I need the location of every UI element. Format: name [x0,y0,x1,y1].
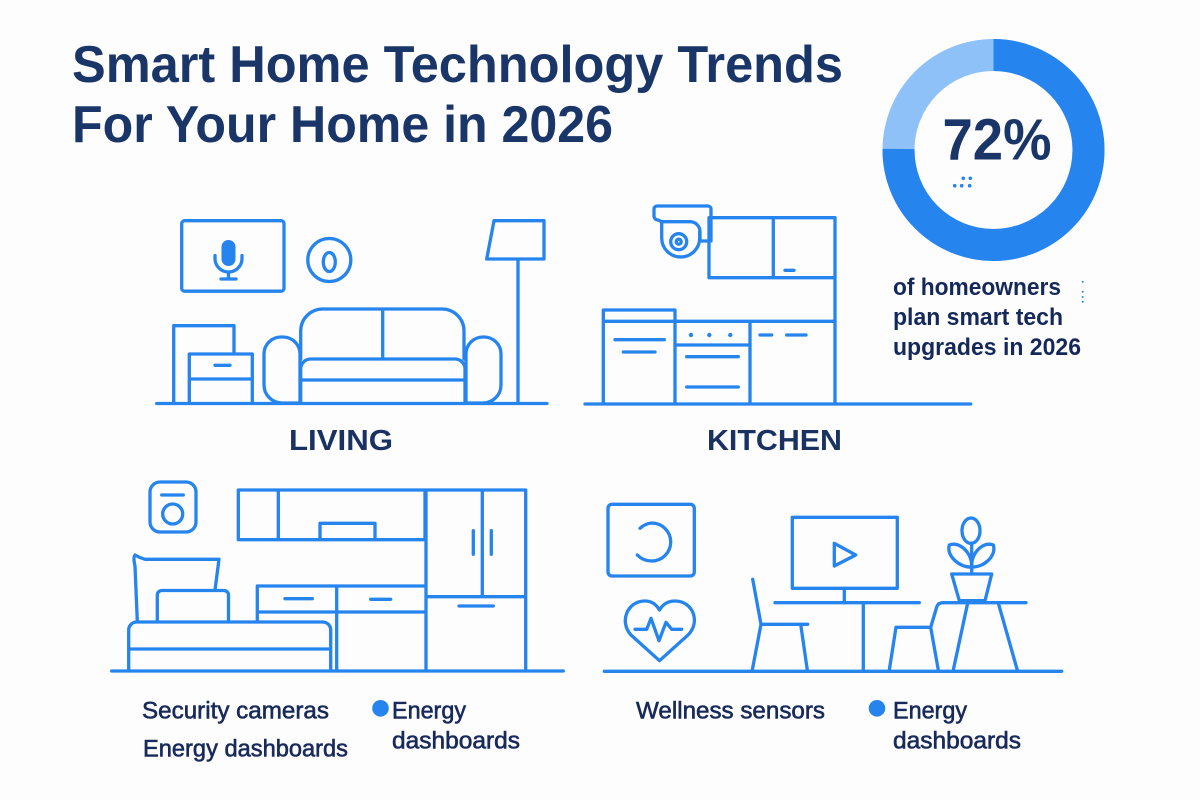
donut caption: of homeowners [893,274,1061,301]
donut chart: 72%: 72% [942,108,1052,172]
list: wellness features [636,698,1021,754]
right chair [889,603,943,670]
list: bedroom features: dashboards [392,728,520,754]
list: wellness features: Wellness sensors [636,698,825,724]
floor line [112,669,563,673]
left chair [752,579,808,670]
panel: bedroom [112,482,563,671]
floor lamp [487,221,544,403]
panel: living room [157,221,547,404]
base cabinets [603,310,835,404]
upper cabinets [709,218,835,404]
icon: round smart speaker [308,238,351,282]
donut caption: plan smart tech [893,304,1063,331]
panel: wellness office [604,504,1062,671]
icon: wall display with ring [608,504,694,576]
title: For Your Home in 2026 [72,96,613,154]
list: bedroom features [142,698,520,762]
donut caption: upgrades in 2026 [893,334,1081,361]
oven knobs [689,333,732,337]
list: bedroom features: Energy [392,698,466,724]
side cabinet [174,326,252,403]
list: wellness features: Energy [893,698,967,724]
monitor with play icon [792,517,897,603]
desk with drawers [257,586,426,671]
sofa [264,309,501,403]
label: living: LIVING [289,425,393,457]
title [72,36,843,154]
side table [943,603,1026,670]
desk [775,603,919,671]
icon: security camera [654,206,711,257]
tall wardrobe [426,490,526,671]
label: kitchen: KITCHEN [707,425,842,457]
donut chart: 72% [898,55,1088,245]
floor line [585,402,971,406]
floor line [604,670,1062,673]
upper cabinets [238,490,425,540]
panel: kitchen [585,206,971,404]
list: bedroom features: Security cameras [142,698,329,724]
potted plant [949,518,994,601]
floor line [157,402,547,405]
icon: wall sensor [150,482,196,532]
title: Smart Home Technology Trends [72,36,843,94]
list: bedroom features: Energy dashboards [143,736,348,762]
icon: heart with pulse [625,601,694,661]
bed and pillows [129,555,331,671]
list: wellness features: dashboards [893,728,1021,754]
icon: wall panel with microphone [182,221,284,291]
donut caption [893,274,1084,361]
